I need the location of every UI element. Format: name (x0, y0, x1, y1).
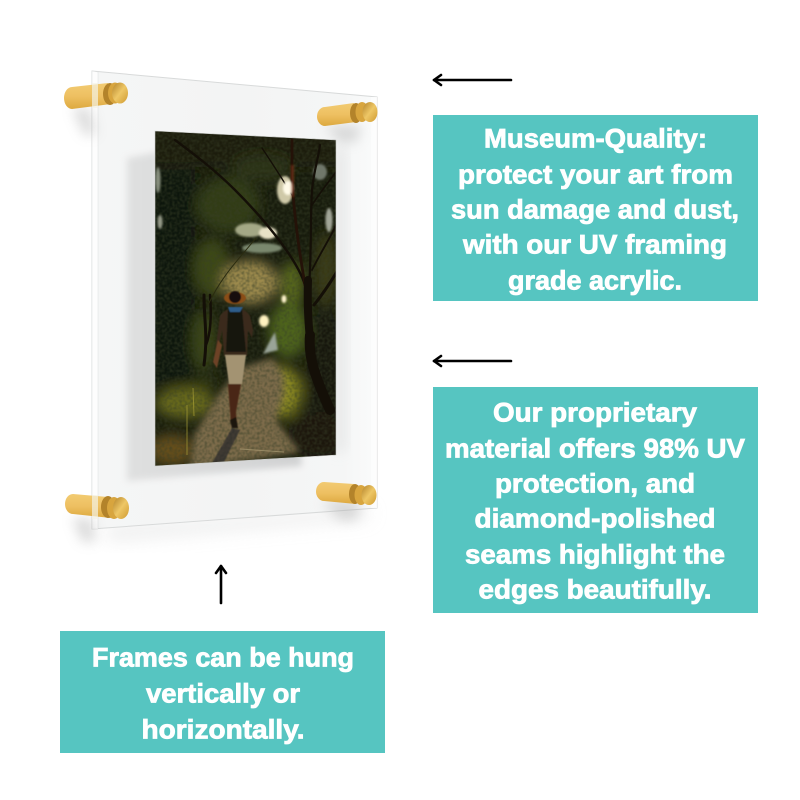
panel text: protection, and (495, 468, 695, 498)
panel text: seams highlight the (465, 540, 725, 570)
panel text: material offers 98% UV (445, 434, 745, 464)
panel: museum quality (433, 115, 758, 301)
walker shadow (212, 428, 240, 463)
panel text (92, 642, 354, 744)
arrow: middle callout (434, 356, 511, 366)
panel text: vertically or (146, 678, 300, 708)
foliage speckle (156, 132, 336, 464)
arrow: bottom callout (216, 566, 226, 603)
panel: proprietary material (433, 387, 758, 613)
standoff: top right (317, 102, 378, 126)
panel: hanging orientation (60, 631, 385, 753)
panel text: Museum-Quality: (484, 124, 707, 154)
arrow: top callout (434, 75, 511, 85)
frame wall shadow (104, 509, 370, 540)
panel text: edges beautifully. (478, 574, 712, 604)
photo border (155, 131, 336, 466)
panel text (445, 398, 745, 604)
distant bridge (263, 332, 278, 354)
panel text (451, 124, 739, 296)
sun and lamp flares (259, 165, 294, 327)
tree branches (175, 140, 338, 410)
panel text: sun damage and dust, (451, 194, 739, 224)
panel text: protect your art from (458, 160, 733, 190)
photo shadow on wall (127, 152, 302, 481)
panel text: grade acrylic. (508, 266, 682, 296)
walker figure (213, 291, 253, 428)
tonal areas of foliage (155, 132, 336, 466)
grass highlights (187, 388, 284, 455)
acrylic panel (92, 71, 377, 529)
standoff: bottom left (65, 494, 129, 519)
acrylic frame product (64, 71, 378, 542)
panel text: with our UV framing (462, 230, 727, 260)
standoff: bottom right (316, 482, 376, 505)
panel text: Our proprietary (493, 398, 697, 428)
sky patches (156, 164, 332, 253)
panel text: horizontally. (142, 714, 304, 744)
standoff shadows (72, 108, 362, 542)
polished right edge (371, 97, 377, 508)
panel text: Frames can be hung (92, 642, 354, 672)
shadow right of photo (336, 145, 346, 455)
panel text: diamond-polished (474, 504, 716, 534)
standoff: top left (64, 82, 128, 109)
dirt path (190, 358, 300, 470)
polished left edge (92, 71, 98, 529)
photo: forest path with walker (155, 131, 336, 466)
